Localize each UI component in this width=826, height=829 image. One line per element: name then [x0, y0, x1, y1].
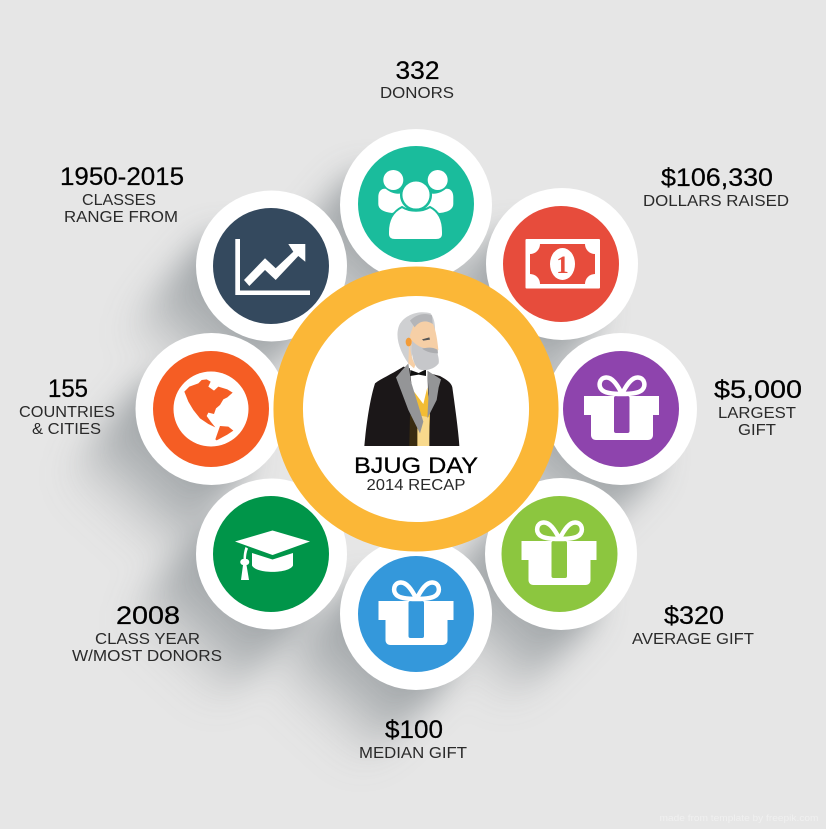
- icon: banknote: [526, 239, 600, 288]
- label: median gift: MEDIAN GIFT: [359, 745, 468, 762]
- label: class year: W/MOST DONORS: [72, 648, 222, 665]
- icon: gift box: [584, 377, 659, 440]
- icon: banknote: 1: [556, 252, 569, 279]
- label: dollars raised: [643, 164, 789, 210]
- label: classes range: [60, 163, 184, 226]
- icon: line chart with arrow: [235, 239, 310, 295]
- label: donors: 332: [396, 57, 440, 85]
- label: countries and cities: 155: [48, 375, 88, 403]
- label: median gift: $100: [385, 716, 443, 744]
- icon: gift box: [522, 522, 596, 585]
- label: countries and cities: COUNTRIES: [19, 404, 115, 421]
- label: average gift: AVERAGE GIFT: [632, 631, 755, 648]
- item: class year (green cap): [196, 478, 347, 630]
- label: classes range: RANGE FROM: [64, 209, 178, 226]
- label: dollars raised: DOLLARS RAISED: [643, 193, 789, 210]
- central ring: [288, 281, 544, 537]
- center subtitle: 2014 RECAP: 2014 RECAP: [366, 477, 466, 494]
- illustration: man in tuxedo: [364, 312, 459, 446]
- label: class year: [72, 602, 222, 665]
- label: largest gift: GIFT: [738, 422, 777, 439]
- item: average gift (lime): [485, 478, 637, 630]
- center title: BJUG DAY: BJUG DAY: [354, 453, 478, 478]
- item: countries and cities (orange globe): [136, 333, 288, 485]
- icon: gift box: [378, 582, 454, 645]
- label: average gift: [632, 602, 755, 648]
- label: classes range: 1950-2015: [60, 163, 184, 191]
- item: dollars raised (red money): [486, 188, 638, 340]
- label: largest gift: [714, 376, 802, 439]
- icon: group of people: [378, 170, 453, 240]
- label: donors: DONORS: [380, 85, 454, 102]
- item: largest gift (purple): [545, 333, 697, 485]
- item: classes range (navy chart): [196, 190, 347, 342]
- label: average gift: $320: [664, 602, 724, 630]
- label: largest gift: $5,000: [714, 376, 802, 404]
- label: class year: CLASS YEAR: [95, 631, 200, 648]
- label: dollars raised: $106,330: [661, 164, 773, 192]
- item: donors (teal people): [340, 129, 492, 281]
- credit: made from template by freepik.com: [660, 813, 819, 824]
- label: median gift: [359, 716, 468, 762]
- label: class year: 2008: [116, 602, 180, 630]
- icon: graduation cap: [235, 530, 310, 580]
- label: largest gift: LARGEST: [718, 405, 797, 422]
- label: classes range: CLASSES: [82, 192, 156, 209]
- icon: globe: [174, 372, 248, 446]
- label: countries and cities: & CITIES: [32, 421, 101, 438]
- label: countries and cities: [19, 375, 115, 438]
- item: median gift (blue): [340, 538, 492, 690]
- label: donors: [380, 57, 454, 102]
